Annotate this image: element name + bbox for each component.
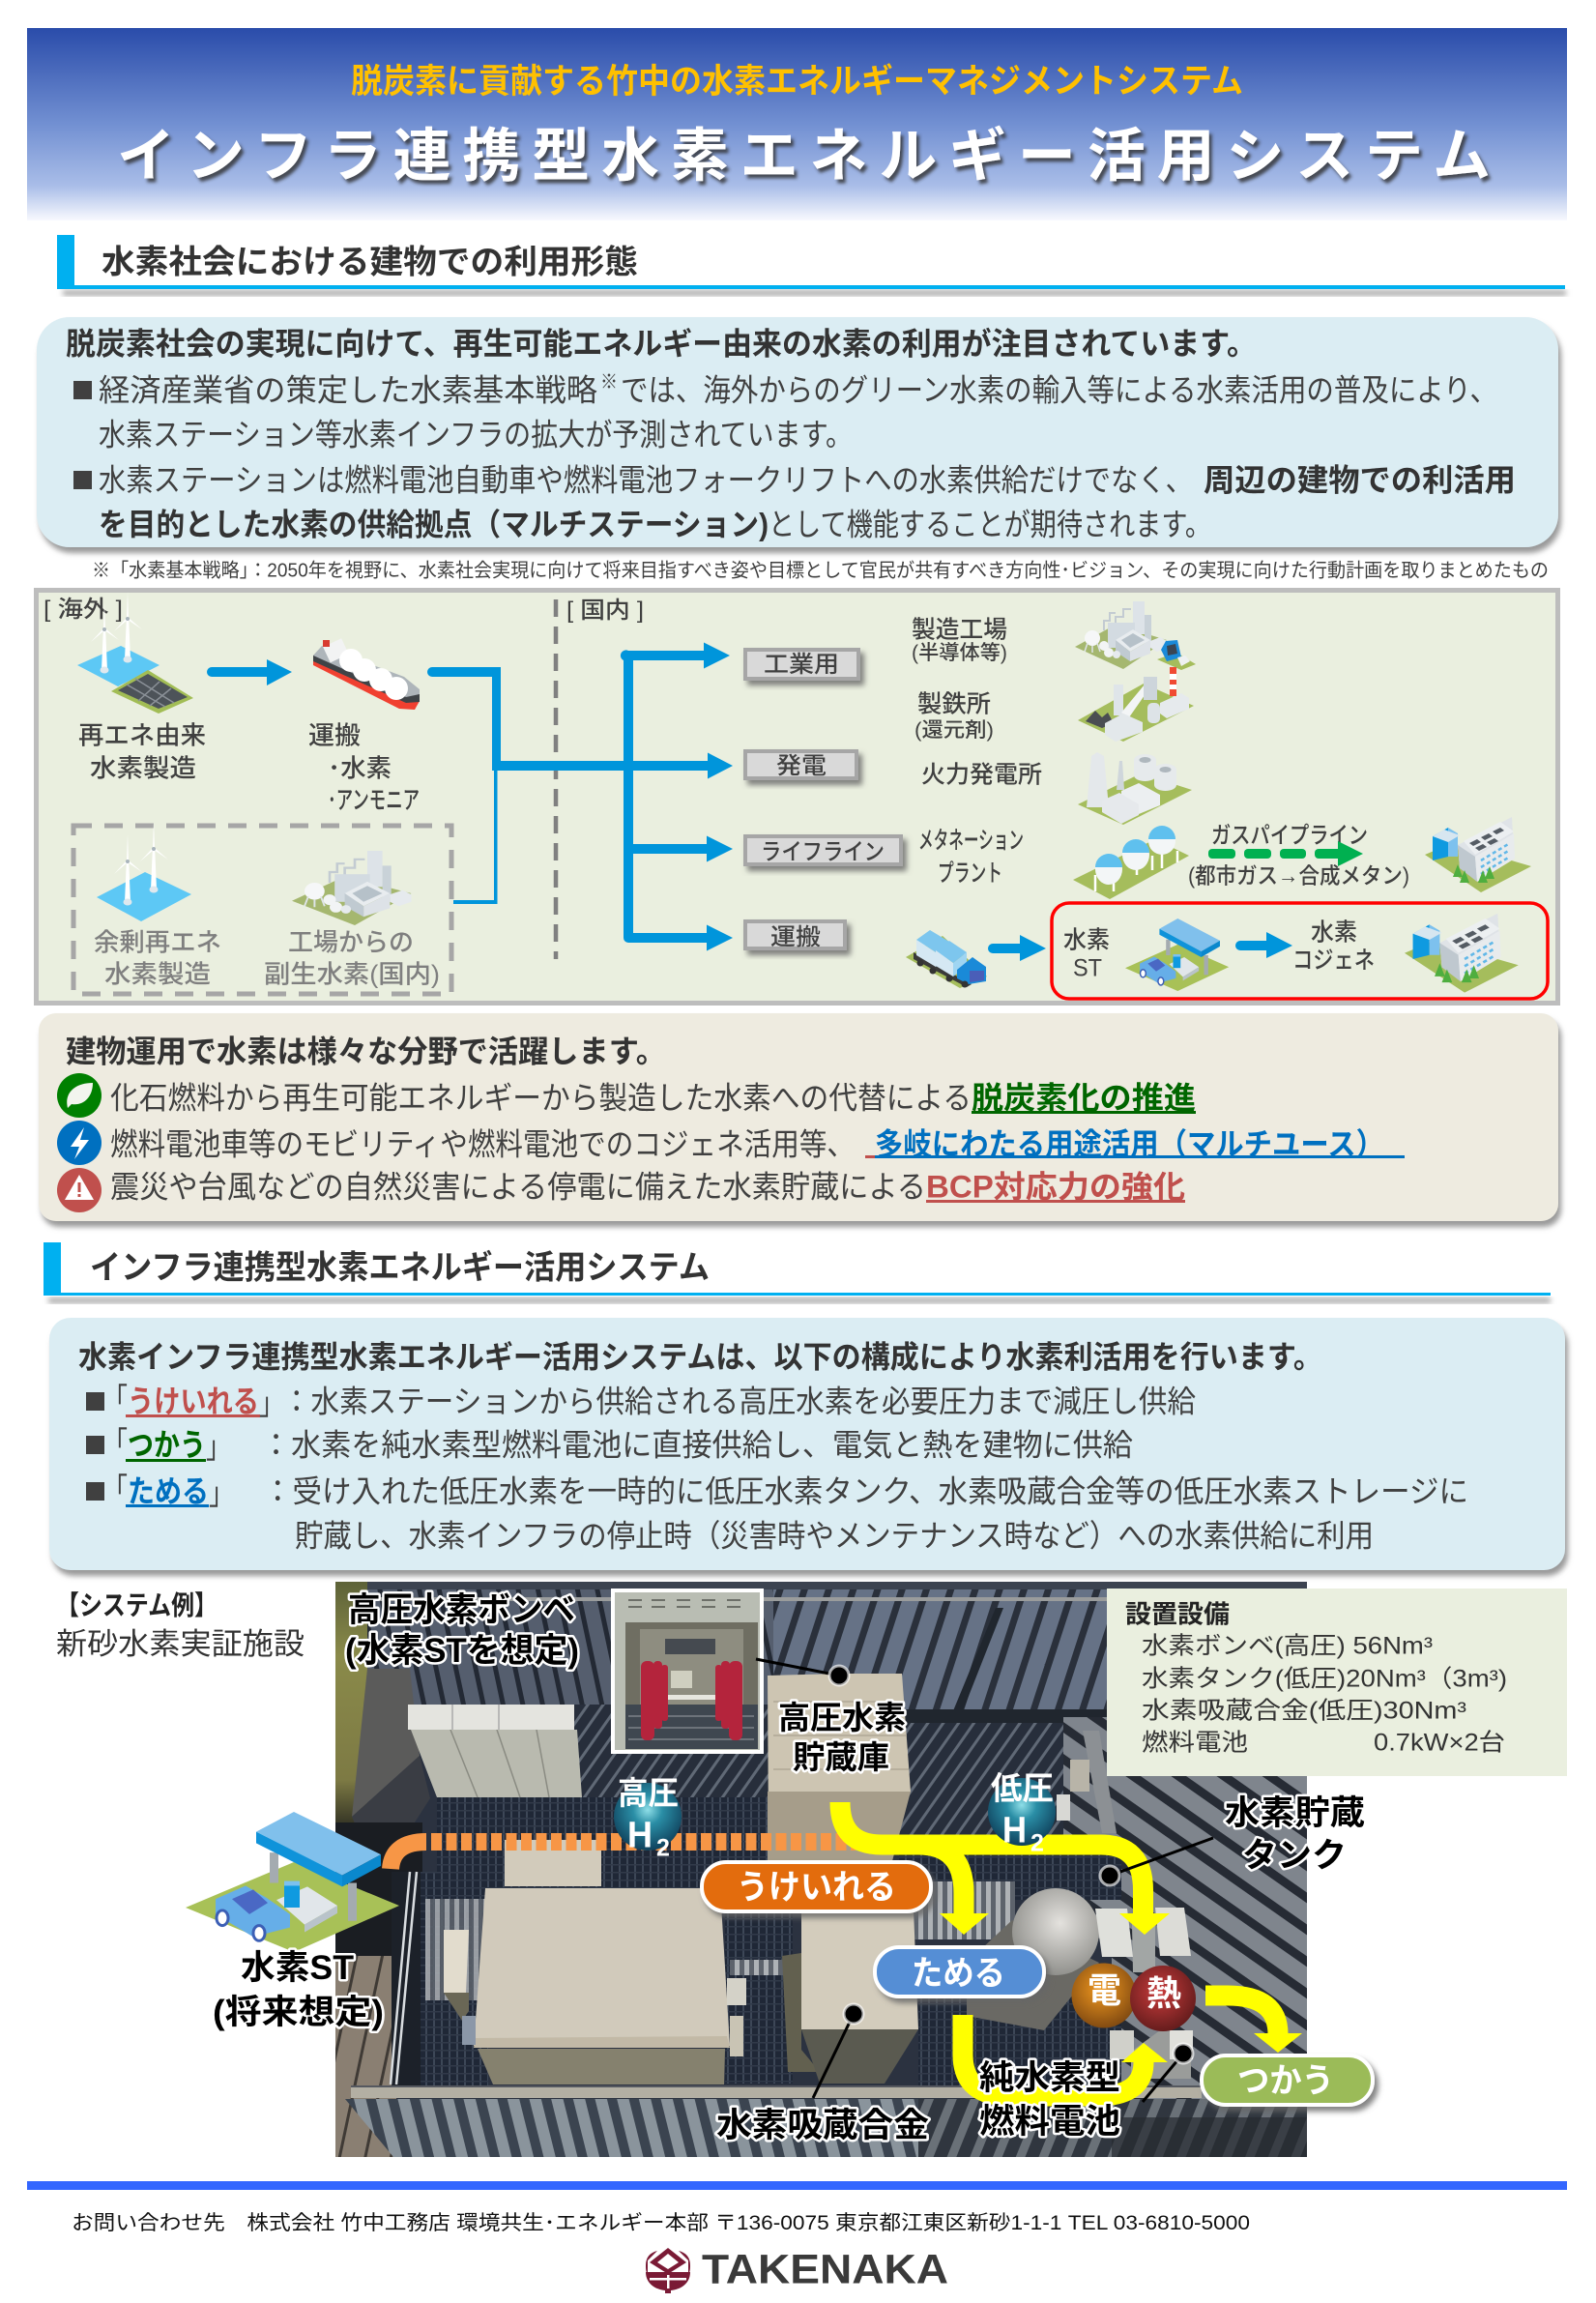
bubble: electricity — [1071, 1963, 1137, 2028]
bullet 1: 経済産業省の策定した水素基本戦略 — [99, 373, 597, 408]
panel: system description — [49, 1318, 1565, 1570]
bullet 2: を目的とした水素の供給拠点（マルチステーション) — [99, 507, 769, 541]
inset photo: cylinders — [613, 1590, 762, 1752]
label: metal hydride: 水素吸蔵合金 — [716, 2107, 929, 2144]
item: store: ：受け入れた低圧水素を一時的に低圧水素タンク、水素吸蔵合金等の低圧水素ストレージに — [263, 1473, 1468, 1508]
gas pipeline: (都市ガス→合成メタン) — [1188, 862, 1409, 888]
text: application labels: 製造工場 — [912, 617, 1007, 644]
label: storage hut: 貯蔵庫 — [793, 1739, 889, 1775]
white cabinet — [408, 1705, 582, 1797]
pill: receive: うけいれる — [737, 1869, 896, 1907]
bubble: high pressure H2: 2 — [656, 1835, 670, 1862]
icon: truck — [906, 930, 987, 988]
bubble: low pressure H2: H — [1002, 1810, 1027, 1851]
deck and railing left — [335, 1872, 421, 2157]
benefit: multi use: 多岐にわたる用途活用（マルチユース） — [875, 1127, 1384, 1162]
benefit: multi use — [110, 1127, 1405, 1162]
pill: use — [1202, 2055, 1373, 2105]
red highlight box: station and cogeneration: コジェネ — [1292, 947, 1375, 975]
label: fuel cell: 純水素型 — [979, 2059, 1120, 2097]
text: transport: ･水素 — [328, 754, 392, 783]
label: fuel cell: 燃料電池 — [979, 2103, 1120, 2141]
icon: factory with forklift — [1075, 601, 1196, 670]
benefit: BCP: 震災や台風などの自然災害による停電に備えた水素貯蔵による — [110, 1170, 926, 1205]
text: transport: ･アンモニア — [328, 785, 420, 814]
item: receive: 「 — [102, 1383, 128, 1417]
dashed box: domestic sources — [73, 822, 451, 994]
label: storage hut: 高圧水素 — [778, 1700, 906, 1735]
red highlight box: station and cogeneration: 水素 — [1063, 926, 1110, 953]
upper gratings — [367, 1582, 1307, 2099]
arrow: station to cogeneration — [1235, 932, 1292, 958]
text: surplus renewable: 余剰再エネ — [94, 928, 221, 957]
icon: thermal power plant — [1078, 752, 1192, 825]
bullet 2: 水素ステーションは燃料電池自動車や燃料電池フォークリフトへの水素供給だけでなく、 — [99, 462, 1193, 497]
panel: installed equipment — [1107, 1589, 1567, 1776]
item: store — [86, 1472, 1468, 1553]
item: use: 」 — [206, 1429, 231, 1464]
gas pipeline — [1188, 823, 1409, 888]
text: renewable hydrogen production: 水素製造 — [90, 754, 196, 783]
benefit: multi use: 燃料電池車等のモビリティや燃料電池でのコジェネ活用等、 — [110, 1127, 855, 1162]
item: receive — [86, 1383, 1196, 1421]
hedge and concrete — [335, 1582, 430, 1958]
text: transport — [308, 721, 420, 814]
text: system example label: 新砂水素実証施設 — [56, 1627, 305, 1661]
icon: building small — [1405, 914, 1519, 993]
photo: demonstration facility — [335, 1582, 1307, 2157]
header banner — [27, 28, 1567, 220]
item: receive: うけいれる — [128, 1385, 259, 1419]
arrow: to ship — [207, 659, 292, 685]
gas pipeline: ガスパイプライン — [1211, 823, 1368, 849]
icon: leaf — [57, 1073, 102, 1118]
box: transport: 運搬 — [770, 924, 821, 950]
label: hydrogen station: 水素ST — [241, 1949, 354, 1987]
pill: store — [875, 1947, 1044, 1997]
contact text: お問い合わせ先 株式会社 竹中工務店 環境共生･エネルギー本部 〒136-0075 東京都江東区新砂1-1-1 TEL 03-6810-5000 — [72, 2212, 1250, 2234]
text: application labels — [912, 617, 1042, 888]
bubble: high pressure H2: H — [627, 1816, 653, 1856]
small box — [505, 1840, 601, 1886]
text: application labels: メタネーション — [918, 828, 1024, 855]
benefit: BCP: BCP対応力の強化 — [926, 1170, 1185, 1205]
box: industrial use — [745, 650, 858, 679]
hydride unit — [782, 1909, 918, 2084]
arrow: truck to station — [988, 935, 1046, 961]
icon: hydrogen station small — [1125, 918, 1229, 991]
box: power generation — [745, 751, 856, 779]
item: use: つかう — [128, 1427, 206, 1462]
domestic label: [ 国内 ] — [566, 598, 644, 624]
icon: factory — [292, 851, 412, 925]
icon: office building — [1425, 817, 1531, 892]
bullet 1: ※ — [600, 371, 618, 393]
label: storage hut — [778, 1700, 906, 1775]
item: use: 「 — [102, 1425, 128, 1460]
logo mark — [646, 2248, 690, 2293]
footnote: ※「水素基本戦略」：2050年を視野に、水素社会実現に向けて将来目指すべき姿や目標として官民が共有すべき方向性･ビジョン、その実現に向けた行動計画を取りまとめたもの — [92, 559, 1549, 582]
panel: installed equipment: 燃料電池 — [1142, 1729, 1248, 1756]
item: store: 」 — [209, 1475, 234, 1510]
pill: use: つかう — [1237, 2062, 1334, 2100]
yellow flow arrows — [840, 1802, 1302, 2096]
bubble: low pressure H2: 低圧 — [991, 1770, 1054, 1806]
label: high pressure cylinders: (水素STを想定) — [345, 1632, 579, 1670]
box: lifeline: ライフライン — [761, 839, 885, 865]
label: hydrogen station — [213, 1949, 384, 2031]
footer bar — [27, 2181, 1567, 2190]
section heading: system: インフラ連携型水素エネルギー活用システム — [90, 1249, 710, 1286]
logo wordmark: TAKENAKA — [702, 2247, 948, 2293]
text: renewable hydrogen production: 再エネ由来 — [78, 721, 206, 750]
label: high pressure cylinders: 高圧水素ボンベ — [348, 1591, 575, 1629]
red highlight box: station and cogeneration: 水素 — [1311, 918, 1357, 946]
text: application labels: 火力発電所 — [921, 762, 1042, 789]
bullet 2: として機能することが期待されます。 — [769, 507, 1211, 541]
item: receive: ：水素ステーションから供給される高圧水素を必要圧力まで減圧し供給 — [282, 1385, 1196, 1419]
pill: receive — [702, 1862, 931, 1911]
bubble: high pressure H2 — [614, 1775, 682, 1862]
item: store: 貯蔵し、水素インフラの停止時（災害時やメンテナンス時など）への水素供給に利用 — [295, 1518, 1374, 1553]
panel: installed equipment: 水素吸蔵合金(低圧)30Nm³ — [1142, 1698, 1466, 1725]
label: hydrogen tank — [1225, 1794, 1365, 1875]
benefit: decarbonization: 化石燃料から再生可能エネルギーから製造した水素への代替による — [110, 1081, 972, 1116]
benefit: decarbonization: 脱炭素化の推進 — [972, 1081, 1196, 1116]
hydrogen storage hut — [768, 1674, 911, 1861]
box: power generation: 発電 — [776, 753, 827, 779]
bullet 1 — [73, 371, 1497, 452]
icon: surplus wind — [97, 822, 191, 921]
hydrogen tank — [967, 1888, 1193, 2079]
pill: store: ためる — [912, 1955, 1005, 1993]
icon: steel mill — [1078, 667, 1194, 742]
panel: system description: 水素インフラ連携型水素エネルギー活用システムは、以下の構成により水素利活用を行います。 — [78, 1340, 1322, 1375]
red highlight box: station and cogeneration: ST — [1073, 955, 1102, 982]
icon: wind and solar — [77, 592, 193, 714]
red highlight box: station and cogeneration — [1052, 903, 1548, 999]
bullet 1: では、海外からのグリーン水素の輸入等による水素活用の普及により、 — [621, 373, 1497, 408]
text: system example label — [56, 1590, 305, 1661]
box: industrial use: 工業用 — [764, 652, 839, 678]
dashed box: domestic sources: 副生水素(国内) — [264, 959, 440, 988]
icon: lightning — [57, 1121, 102, 1165]
bubble: low pressure H2 — [988, 1770, 1056, 1856]
text: transport: 運搬 — [308, 721, 361, 750]
bullet 2: 周辺の建物での利活用 — [1204, 462, 1516, 497]
label: fuel cell — [979, 2059, 1120, 2141]
icon: warning — [57, 1168, 102, 1212]
text: renewable hydrogen production — [78, 721, 206, 783]
bubble: high pressure H2: 高圧 — [618, 1775, 679, 1811]
flow lines and arrows — [427, 642, 733, 951]
pipe: high pressure orange — [391, 1842, 856, 1869]
label: hydrogen tank: タンク — [1242, 1837, 1347, 1875]
main title: インフラ連携型水素エネルギー活用システム — [117, 124, 1491, 189]
text: system example label: 【システム例】 — [56, 1590, 218, 1620]
panel: installed equipment: 0.7kW×2台 — [1374, 1729, 1505, 1756]
label: hydrogen tank: 水素貯蔵 — [1225, 1794, 1365, 1832]
railing and fence — [345, 2085, 1307, 2157]
bullet 2 — [73, 462, 1516, 541]
lead sentence: 脱炭素社会の実現に向けて、再生可能エネルギー由来の水素の利用が注目されています。 — [66, 327, 1257, 362]
panel: benefits: 建物運用で水素は様々な分野で活躍します。 — [66, 1035, 666, 1069]
panel: hydrogen supply chain diagram — [37, 590, 1558, 1004]
section heading: usage in buildings — [57, 235, 1566, 296]
item: use: ：水素を純水素型燃料電池に直接供給し、電気と熱を建物に供給 — [261, 1427, 1133, 1462]
subtitle: 脱炭素に貢献する竹中の水素エネルギーマネジメントシステム — [351, 63, 1243, 101]
bubble: electricity: 電 — [1088, 1970, 1121, 2010]
text: application labels: (半導体等) — [912, 642, 1007, 664]
bubble: heat: 熱 — [1146, 1973, 1181, 2013]
panel: benefits — [39, 1013, 1558, 1221]
bullet 1: 水素ステーション等水素インフラの拡大が予測されています。 — [99, 418, 853, 452]
logo — [646, 2247, 948, 2293]
overseas label: [ 海外 ] — [44, 597, 123, 623]
icon: methanation tanks — [1073, 826, 1189, 899]
section heading: system — [44, 1242, 1551, 1303]
item: store: ためる — [128, 1473, 209, 1508]
icon: ship — [313, 638, 420, 710]
label: high pressure cylinders — [345, 1591, 579, 1670]
bubble: heat — [1130, 1966, 1196, 2031]
item: store: 「 — [102, 1472, 128, 1506]
label: hydrogen station: (将来想定) — [213, 1994, 384, 2031]
text: application labels: (還元剤) — [914, 719, 994, 742]
text: application labels: 製鉄所 — [917, 690, 991, 717]
box: transport — [745, 921, 845, 950]
dashed box: domestic sources: 水素製造 — [104, 959, 211, 988]
panel: installed equipment: 水素タンク(低圧)20Nm³（3m³) — [1142, 1665, 1507, 1692]
leader lines and dots — [756, 1659, 1213, 2102]
section heading: usage in buildings: 水素社会における建物での利用形態 — [102, 244, 638, 280]
pipe and valve — [1057, 1731, 1117, 1833]
large storage box — [444, 1888, 746, 2084]
bubble: low pressure H2: 2 — [1030, 1829, 1044, 1856]
item: receive: 」 — [259, 1386, 284, 1421]
floor grating around box — [421, 1861, 1121, 2093]
panel: installed equipment: 水素ボンベ(高圧) 56Nm³ — [1142, 1632, 1433, 1659]
text: by-product hydrogen: 工場からの — [288, 928, 414, 957]
panel: intro text — [37, 317, 1558, 547]
icon: station large — [186, 1812, 399, 1952]
panel: installed equipment: 設置設備 — [1125, 1599, 1230, 1628]
text: application labels: プラント — [938, 860, 1002, 888]
